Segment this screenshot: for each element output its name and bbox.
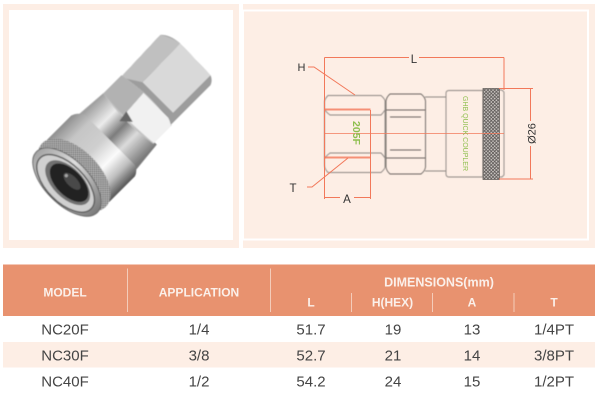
table <box>3 264 595 390</box>
panel: technical drawing <box>243 4 595 248</box>
label: quick coupler stamp: GHB QUICK COUPLER <box>461 96 468 171</box>
label: H: H <box>298 62 306 74</box>
row: NC20F: 1/4 <box>189 322 209 338</box>
table header: DIMENSIONS(mm) <box>384 276 494 290</box>
row: NC20F: NC20F <box>41 322 89 338</box>
table header: A <box>468 296 477 310</box>
row: NC20F: 13 <box>464 322 480 338</box>
row: NC20F: 19 <box>385 322 401 338</box>
row: NC30F: 3/8 <box>189 348 209 364</box>
row: NC40F: 54.2 <box>296 374 326 390</box>
table header: H(HEX) <box>372 296 413 310</box>
panel: product photo <box>3 4 239 248</box>
row: NC40F <box>41 374 574 390</box>
row: NC40F: 1/2PT <box>534 374 574 390</box>
row: NC30F: NC30F <box>41 348 89 364</box>
row: NC40F: 15 <box>464 374 480 390</box>
table header: T <box>550 296 558 310</box>
dimension lines <box>307 58 533 199</box>
row: NC20F: 51.7 <box>296 322 326 338</box>
row: NC40F: NC40F <box>41 374 89 390</box>
row: NC30F: 3/8PT <box>534 348 574 364</box>
row: NC20F: 1/4PT <box>534 322 574 338</box>
table header: APPLICATION <box>159 286 239 300</box>
label: T: T <box>289 183 297 195</box>
table header: MODEL <box>43 286 87 300</box>
row: NC20F <box>41 322 574 338</box>
table rows <box>41 322 574 390</box>
table header: L <box>307 296 315 310</box>
label: model stamp: 205F <box>350 121 362 146</box>
row: NC30F: 21 <box>385 348 401 364</box>
row: NC40F: 24 <box>385 374 401 390</box>
label: L: L <box>411 54 418 66</box>
row highlight <box>3 342 595 368</box>
label: A: A <box>343 194 351 206</box>
label: diameter 26: Ø26 <box>526 123 538 144</box>
icon: chrome quick coupler photo <box>20 24 225 229</box>
row: NC40F: 1/2 <box>189 374 209 390</box>
row: NC30F: 52.7 <box>296 348 326 364</box>
table header <box>3 264 595 316</box>
coupler outline drawing <box>324 90 504 177</box>
knurled grip <box>483 88 500 180</box>
row: NC30F: 14 <box>464 348 480 364</box>
row: NC30F <box>41 348 574 364</box>
